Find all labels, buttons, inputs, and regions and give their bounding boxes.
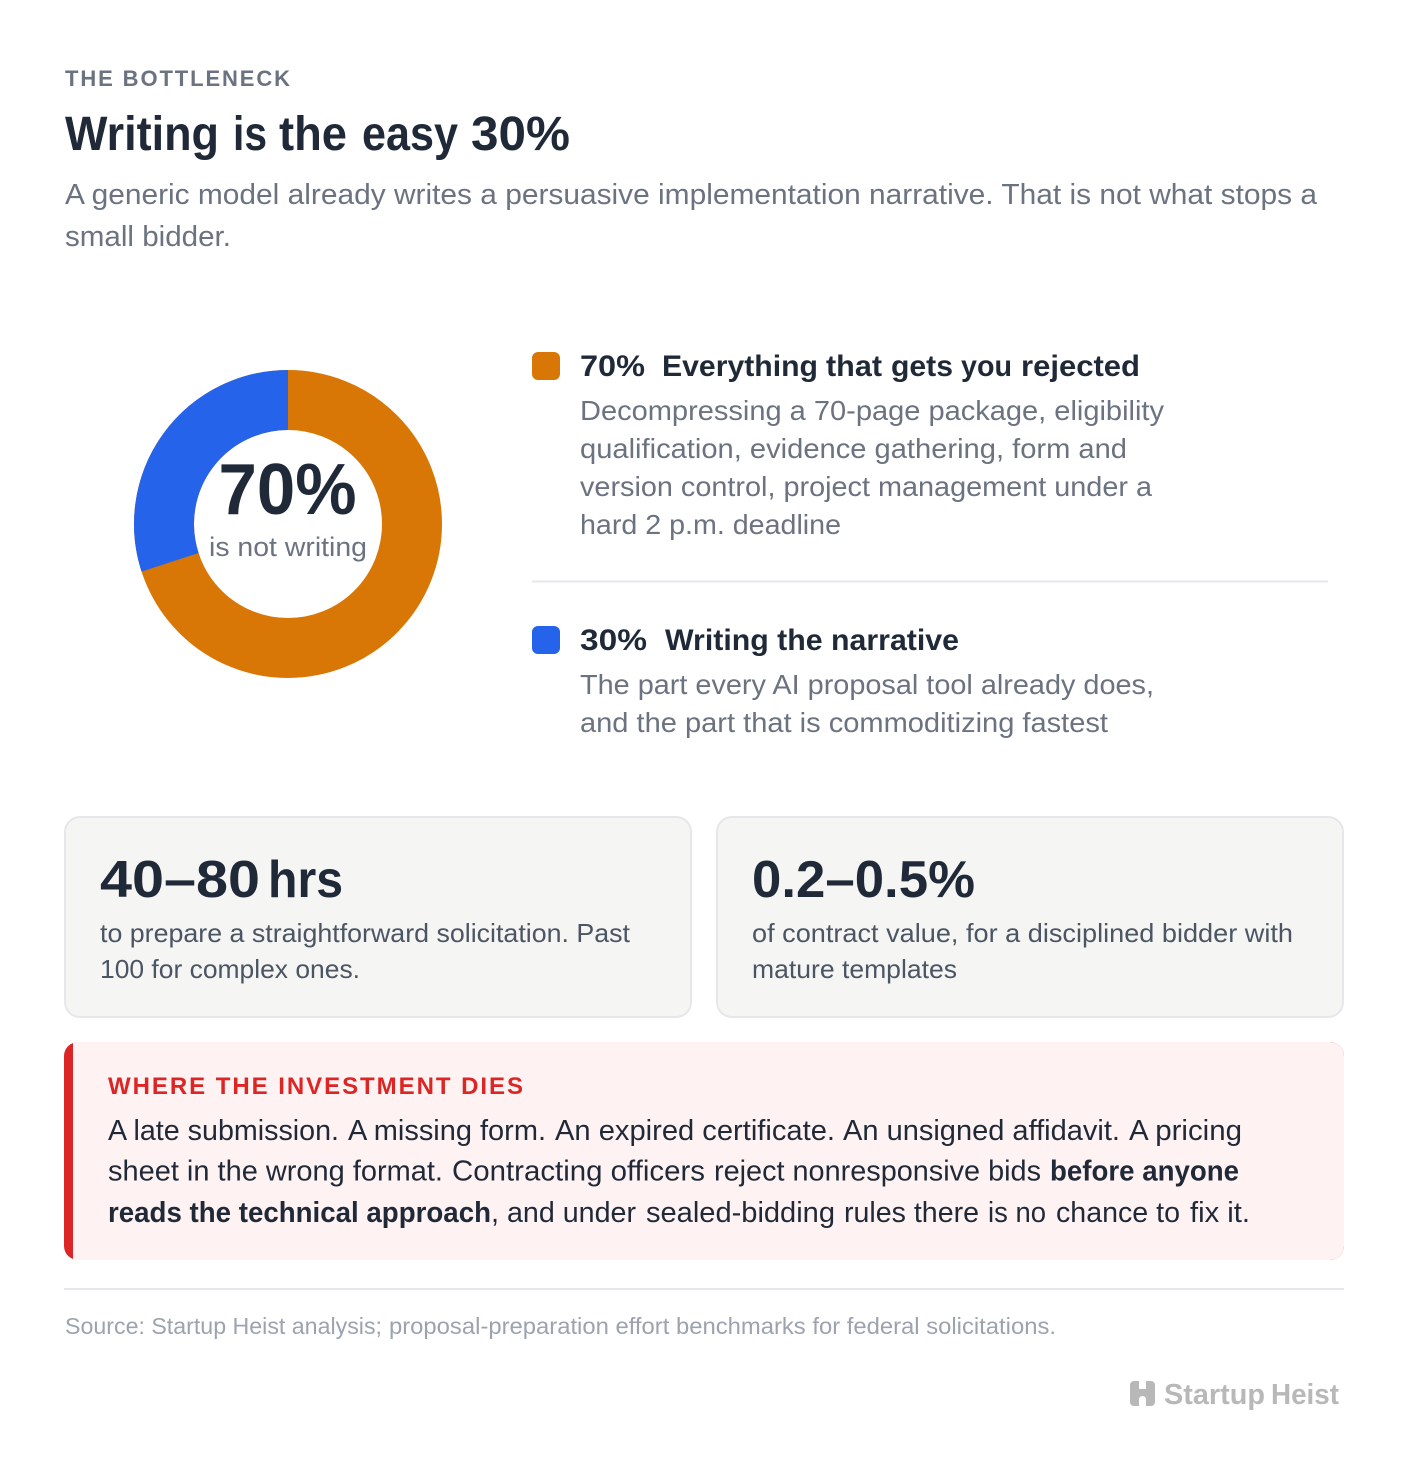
- legend description: 30%: and the part that is commoditizing fastest: [580, 707, 1108, 738]
- donut center label: [209, 450, 367, 562]
- donut segment: 70% everything else: [164, 400, 412, 648]
- legend heading: 70%: gets: [891, 350, 953, 383]
- callout body: A missing form.: [348, 1115, 546, 1147]
- legend description: 30%: [580, 669, 1154, 738]
- legend heading: 70%: rejected: [1021, 350, 1140, 383]
- brand name: [1164, 1379, 1339, 1411]
- source note: proposal-preparation effort benchmarks for federal solicitations.: [389, 1313, 1056, 1339]
- callout body: reject nonresponsive bids: [714, 1156, 1041, 1188]
- legend description: 70%: Decompressing a 70-page package, eligibility: [580, 395, 1164, 426]
- legend: 30%: [532, 624, 1154, 738]
- callout: where the investment dies: [64, 1042, 1344, 1260]
- title: is: [233, 108, 267, 161]
- legend: 70%: [532, 350, 1164, 540]
- stat description: to prepare a straightforward solicitation. Past: [100, 918, 631, 948]
- stat value: hrs: [268, 851, 343, 909]
- callout body: before anyone: [1050, 1156, 1239, 1188]
- title: Writing: [65, 108, 219, 161]
- legend heading: 30%: Writing the narrative: [665, 624, 959, 657]
- brand name: Heist: [1271, 1379, 1339, 1411]
- callout body: An unsigned affidavit.: [843, 1115, 1120, 1147]
- callout body: An expired certificate.: [555, 1115, 835, 1147]
- eyebrow label: THE BOTTLENECK: [65, 66, 290, 91]
- callout body: Contracting officers: [452, 1156, 705, 1188]
- title: 30%: [471, 108, 570, 161]
- callout body: ,: [491, 1197, 499, 1229]
- stat description: [752, 918, 1293, 984]
- title: easy: [362, 108, 458, 161]
- callout heading: WHERE THE INVESTMENT DIES: [108, 1073, 523, 1100]
- stat description: [100, 918, 631, 984]
- subtitle: A generic model already writes a persuasive implementation narrative. That is not what stops a: [65, 179, 1318, 211]
- icon: logo mark: [1130, 1381, 1155, 1406]
- callout body: rules there: [844, 1197, 979, 1229]
- subtitle: small bidder.: [65, 221, 231, 253]
- stat card: hours: [65, 817, 691, 1017]
- legend description: 70%: [580, 395, 1164, 540]
- callout body: sealed-bidding: [646, 1197, 835, 1229]
- swatch: orange: [532, 352, 560, 380]
- donut chart: [164, 400, 412, 648]
- callout body: A late submission.: [108, 1115, 339, 1147]
- donut segment: 30% writing: [164, 400, 288, 562]
- callout body: chance to: [1056, 1197, 1180, 1229]
- brand name: Startup: [1164, 1379, 1265, 1411]
- legend heading: 70%: that: [826, 350, 882, 383]
- stat description: 100 for complex ones.: [100, 954, 360, 984]
- legend description: 70%: version control, project management under a: [580, 471, 1152, 502]
- callout body: and under: [507, 1197, 636, 1229]
- title: the: [279, 108, 347, 161]
- stat value: [100, 851, 343, 909]
- subtitle: [65, 179, 1318, 253]
- legend heading: 30%: 30%: [580, 624, 647, 657]
- callout body: reads the technical approach: [108, 1197, 491, 1229]
- callout body: sheet in the wrong format.: [108, 1156, 443, 1188]
- legend heading: 70%: Everything: [662, 350, 818, 383]
- stat description: of contract value, for a disciplined bidder with: [752, 918, 1293, 948]
- swatch: blue: [532, 626, 560, 654]
- title: [65, 108, 570, 161]
- legend heading: 70%: 70%: [580, 350, 645, 383]
- callout body: A pricing: [1129, 1115, 1242, 1147]
- stat value: 40–80: [100, 851, 260, 909]
- callout body: fix it.: [1190, 1197, 1250, 1229]
- stat description: mature templates: [752, 954, 957, 984]
- callout body: is no: [988, 1197, 1046, 1229]
- brand logo: [1130, 1379, 1339, 1411]
- stat value: 0.2–0.5%: [752, 851, 975, 909]
- stat card: contract value: [717, 817, 1343, 1017]
- legend heading: 70%: [580, 350, 1140, 383]
- legend description: 70%: qualification, evidence gathering, form and: [580, 433, 1127, 464]
- callout body: [108, 1115, 1250, 1229]
- legend heading: 70%: you: [961, 350, 1012, 383]
- legend description: 30%: The part every AI proposal tool already does,: [580, 669, 1154, 700]
- donut center label: 70%: [218, 450, 356, 530]
- donut center label: is not writing: [209, 532, 367, 562]
- source note: Source: Startup Heist analysis;: [65, 1313, 382, 1339]
- legend description: 70%: hard 2 p.m. deadline: [580, 509, 841, 540]
- source note: [65, 1313, 1056, 1339]
